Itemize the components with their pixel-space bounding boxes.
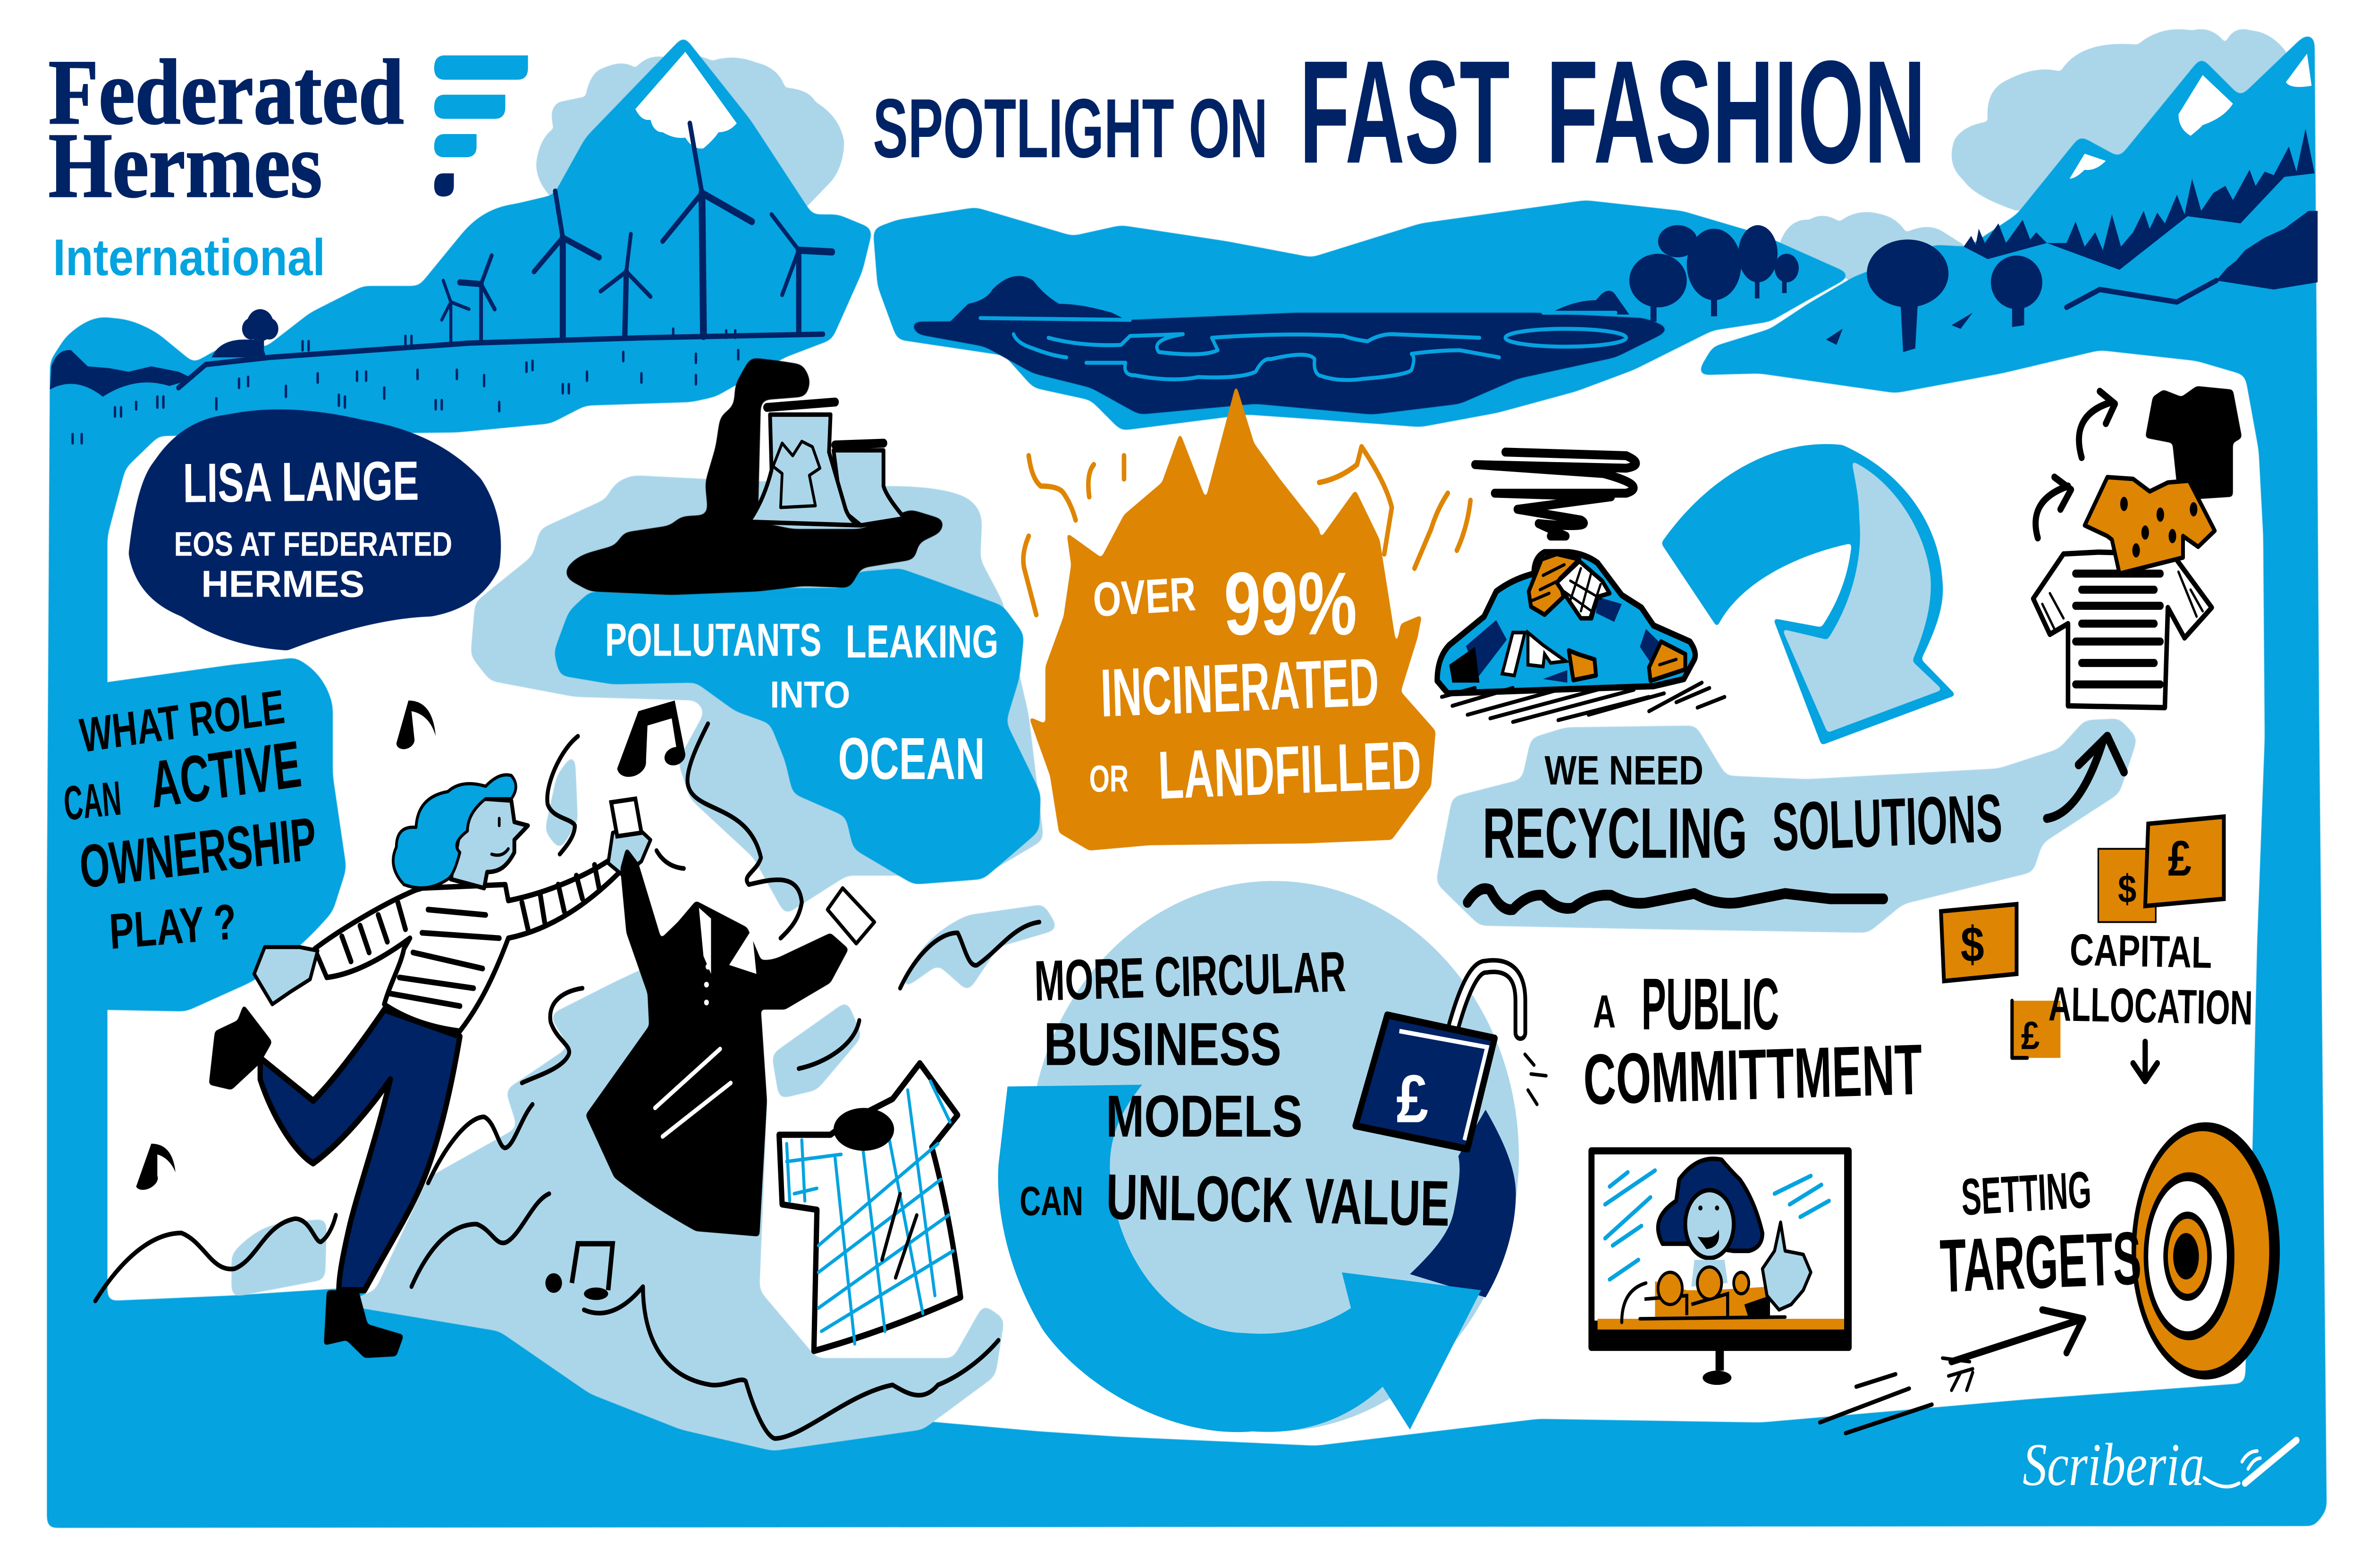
text: a public commitment: PUBLIC [1642, 963, 1779, 1045]
title: FASHION [1546, 30, 1926, 194]
panel: pollutants leaking into ocean [554, 357, 1041, 885]
panel: active ownership question [62, 658, 346, 1012]
panel: we need recycling solutions: SOLUTIONS [1771, 780, 2003, 865]
panel: circular business models: CAN [1020, 1179, 1083, 1224]
panel: pollutants leaking into ocean: POLLUTANTS [605, 614, 821, 666]
forest ridges [50, 129, 2318, 396]
figure: black dress [585, 847, 875, 1237]
title: FAST [1299, 30, 1510, 194]
panel: circular business models: MODELS [1106, 1083, 1303, 1149]
panel: circular business models: MORE CIRCULAR [1034, 939, 1347, 1013]
panel: over 99% incinerated or landfilled flame: 99% [1224, 554, 1357, 654]
panel: circular business models: BUSINESS [1044, 1011, 1281, 1078]
signature: Scriberia [2023, 1431, 2296, 1498]
legs [260, 1010, 460, 1290]
lake with water lines [908, 276, 1673, 414]
squiggle lines and waves [95, 724, 1039, 1439]
icon: target [2132, 1122, 2280, 1380]
central hills [873, 200, 1853, 430]
panel: over 99% incinerated or landfilled flame: OR [1089, 758, 1129, 800]
logo: Federated Hermes International: Federated [49, 41, 404, 143]
face [451, 799, 528, 888]
panel: speaker name bubble: LISA LANGE [183, 450, 419, 514]
white mountain snow caps [635, 52, 2311, 179]
text: capital allocation: CAPITAL [2069, 925, 2212, 978]
panel: pollutants leaking into ocean: OCEAN [838, 725, 985, 792]
panel: active ownership question: CAN [62, 771, 123, 831]
factory smoke [565, 357, 945, 595]
text: capital allocation: ALLOCATION [2048, 977, 2253, 1035]
signature: Scriberia: Scriberia [2023, 1431, 2204, 1498]
icon: money cards [1941, 817, 2224, 1058]
hands [254, 826, 650, 1004]
icon: smoke swirl [1475, 452, 1636, 536]
panel: active ownership question: OWNERSHIP [77, 805, 319, 902]
music notes [136, 700, 685, 1300]
lake and valley trees [1629, 225, 2042, 352]
icon: cooling towers with dress [749, 402, 905, 525]
figure: blue check shirt [779, 1063, 961, 1351]
panel: pollutants leaking into ocean: LEAKING [846, 616, 998, 668]
panel: over 99% incinerated or landfilled flame: LANDFILLED [1157, 727, 1422, 814]
icon: pile of clothes [1437, 552, 1725, 722]
small trees and grass on left hill [73, 309, 738, 443]
panel: speaker name bubble: HERMES [201, 563, 364, 605]
icon: open padlock [1356, 966, 1546, 1149]
arrow: flying arrow to target [1820, 1310, 2083, 1433]
text: capital allocation [2048, 925, 2253, 1081]
panel: over 99% incinerated or landfilled flame: OVER [1092, 567, 1197, 627]
title: SPOTLIGHT ON [873, 81, 1268, 175]
panel: we need recycling solutions: WE NEED [1544, 748, 1703, 793]
panel: circular business models [998, 881, 1546, 1432]
text: a public commitment: COMMITTMENT [1583, 1029, 1923, 1120]
logo mark [434, 55, 528, 196]
icon: money cards: £ [2168, 830, 2191, 886]
icon: money cards: $ [1961, 916, 1984, 972]
text: setting targets: SETTING [1960, 1160, 2092, 1226]
panel: over 99% incinerated or landfilled flame: INCINERATED [1100, 644, 1380, 731]
icon: stack of clothes and arrows [2033, 386, 2242, 708]
panel: speaker name bubble [128, 409, 501, 650]
logo: Federated Hermes International: International [53, 228, 325, 287]
title [873, 30, 1926, 194]
text: setting targets [1939, 1160, 2142, 1308]
panel: pollutants leaking into ocean: INTO [770, 674, 850, 716]
icon: monitor with speaker [1588, 1147, 1852, 1385]
icon: money cards: $ [2118, 867, 2136, 911]
icon: open padlock: £ [1396, 1061, 1428, 1137]
light blue clouds behind mountains [536, 29, 2287, 282]
boots [209, 1004, 404, 1358]
logo: Federated Hermes International: Hermes [49, 114, 322, 217]
panel: over 99% incinerated or landfilled flame [1023, 384, 1470, 851]
panel: we need recycling solutions: RECYCLING [1483, 793, 1747, 873]
panel: speaker name bubble: EOS AT FEDERATED [174, 526, 452, 564]
cuff held in hand [611, 799, 641, 836]
panel: active ownership question: ACTIVE [147, 727, 304, 822]
light blue clouds around pollution and figures [231, 475, 1059, 1451]
curly hair [393, 775, 516, 888]
icon: money cards: £ [2021, 1014, 2040, 1058]
panel: active ownership question: WHAT ROLE [77, 680, 287, 763]
panel: circular business models: UNLOCK VALUE [1106, 1161, 1450, 1239]
wind turbines on hill [178, 123, 832, 388]
figure: dancing woman [209, 775, 650, 1358]
text: a public commitment: A [1593, 986, 1616, 1037]
panel: active ownership question: PLAY ? [108, 893, 238, 960]
text: setting targets: TARGETS [1939, 1216, 2142, 1308]
arrow: big curved arrow down [1661, 444, 1956, 745]
striped top [315, 852, 624, 1031]
panel: we need recycling solutions [1436, 718, 2138, 933]
text: a public commitment [1583, 963, 1923, 1120]
logo: Federated Hermes International [49, 41, 528, 287]
